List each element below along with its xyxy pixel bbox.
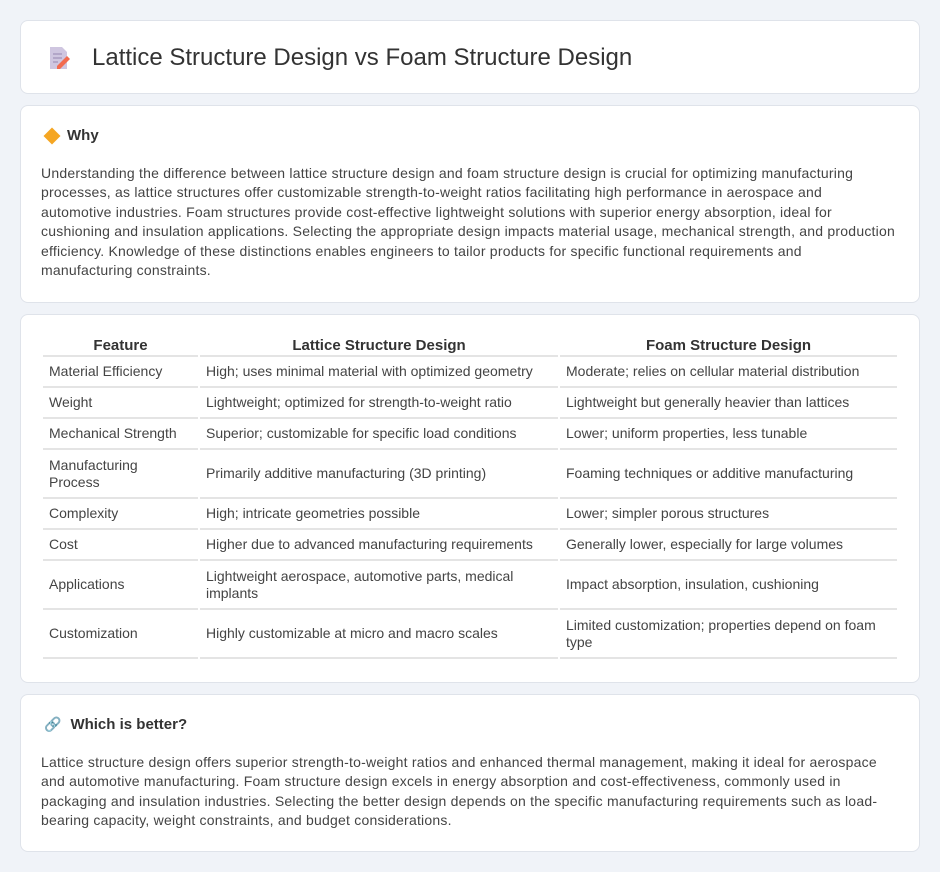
comparison table: Weight <box>49 394 92 410</box>
comparison table: Superior; customizable for specific load conditions <box>206 425 516 441</box>
comparison table: Lightweight but generally heavier than lattices <box>566 394 849 410</box>
which text: and automotive manufacturing. Foam structure design excels in energy absorption and cost-effectiveness, commonly used in <box>41 773 841 789</box>
comparison table <box>43 336 897 659</box>
comparison table: High; uses minimal material with optimized geometry <box>206 363 533 379</box>
comparison table: Generally lower, especially for large volumes <box>566 536 843 552</box>
comparison table: Limited customization; properties depend on foam type <box>566 616 876 650</box>
heading: which is better: 🔗 <box>44 716 61 732</box>
which text: bearing capacity, weight constraints, and budget considerations. <box>41 812 452 828</box>
why text <box>41 165 895 278</box>
comparison table: Lightweight aerospace, automotive parts, medical implants <box>206 568 513 600</box>
comparison table: Highly customizable at micro and macro scales <box>206 625 498 641</box>
title: Lattice Structure Design vs Foam Structure Design <box>92 44 632 71</box>
comparison table: Lightweight; optimized for strength-to-weight ratio <box>206 394 512 410</box>
comparison table: Material Efficiency <box>49 363 162 379</box>
panel: comparison table <box>20 314 920 683</box>
heading: why: Why <box>67 127 99 144</box>
comparison table: High; intricate geometries possible <box>206 505 420 521</box>
comparison table: Primarily additive manufacturing (3D printing) <box>206 465 486 481</box>
why text: cushioning and insulation applications. Selecting the appropriate design impacts material usage, mechanical strength, and production <box>41 223 895 239</box>
comparison table: Impact absorption, insulation, cushioning <box>566 576 819 592</box>
why text: processes, as lattice structures offer customizable strength-to-weight ratios facilitating high performance in aerospace and <box>41 184 822 200</box>
heading: why <box>44 127 99 144</box>
comparison table: Lower; uniform properties, less tunable <box>566 425 807 441</box>
which text: Lattice structure design offers superior strength-to-weight ratios and enhanced thermal management, making it ideal for aerospace <box>41 754 877 770</box>
panel: which is better <box>20 694 920 852</box>
which text <box>41 754 877 828</box>
comparison table: Feature <box>93 336 148 354</box>
panel: why <box>20 105 920 303</box>
comparison table: Lattice Structure Design <box>292 336 466 354</box>
comparison table: Customization <box>49 625 138 641</box>
comparison table: Mechanical Strength <box>49 425 177 441</box>
comparison table: Manufacturing Process <box>49 456 138 490</box>
icon: document with pencil <box>50 47 70 69</box>
comparison table: Complexity <box>49 505 118 521</box>
why text: automotive industries. Foam structures provide cost-effective lightweight solutions with superior energy absorption, ideal for <box>41 204 832 220</box>
why text: Understanding the difference between lattice structure design and foam structure design is crucial for optimizing manufacturing <box>41 165 853 181</box>
heading: which is better: Which is better? <box>70 716 187 733</box>
why text: efficiency. Knowledge of these distinctions enables engineers to tailor products for specific functional requirements and <box>41 243 802 259</box>
comparison table: Moderate; relies on cellular material distribution <box>566 363 859 379</box>
comparison table: Applications <box>49 576 124 592</box>
comparison table: Cost <box>49 536 78 552</box>
which text: packaging and insulation industries. Selecting the better design depends on the specific manufacturing requirements such as load- <box>41 793 877 809</box>
comparison table: Higher due to advanced manufacturing requirements <box>206 536 533 552</box>
comparison table: Lower; simpler porous structures <box>566 505 769 521</box>
comparison table: Foam Structure Design <box>646 336 811 354</box>
comparison table: Foaming techniques or additive manufacturing <box>566 465 853 481</box>
header card <box>20 20 920 94</box>
why text: manufacturing constraints. <box>41 262 211 278</box>
